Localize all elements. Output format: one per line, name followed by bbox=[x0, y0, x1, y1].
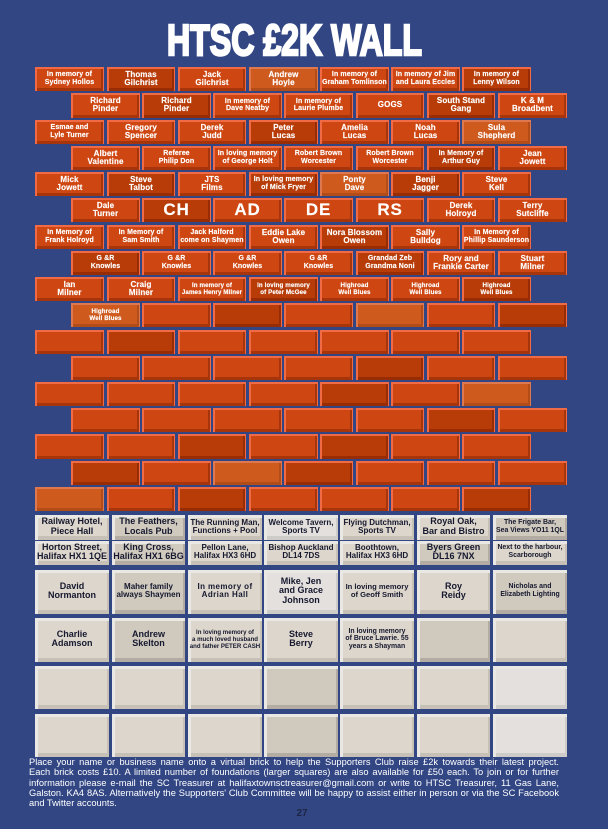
text block: how to take part: information please e-mail the SC Treasurer at halifaxtownsctreasurer@gmail.com or write to HTSC Treasurer, 11 Gas Lane, bbox=[29, 778, 559, 788]
brick row 5: JTS bbox=[204, 174, 219, 184]
foundation row: pub names: Welcome Tavern, bbox=[268, 518, 334, 526]
brick row 2: Richard bbox=[90, 96, 121, 105]
brick row 8: Grandma Noni bbox=[365, 262, 415, 270]
brick row 4: Jowett bbox=[520, 156, 545, 166]
brick row 2: Pinder bbox=[93, 104, 118, 113]
foundation row: sponsors 1: Roy bbox=[445, 580, 462, 590]
brick row 4: Robert Brown bbox=[295, 150, 342, 157]
brick row 7: In Memory of bbox=[119, 229, 163, 236]
brick row 9: Highroad bbox=[483, 282, 510, 288]
foundation row: pub names: Sports TV bbox=[358, 526, 396, 534]
brick row 1: Graham Tomlinson bbox=[322, 78, 387, 86]
brick row 17 bbox=[35, 487, 531, 511]
brick row 5: Jowett bbox=[57, 182, 82, 192]
brick row 2 bbox=[71, 93, 567, 118]
brick row 6: CH bbox=[163, 200, 190, 218]
brick row 8: Knowles bbox=[91, 262, 120, 270]
foundation row: sponsors 2: Steve bbox=[289, 628, 313, 638]
foundation row: pub names: Sports TV bbox=[282, 526, 320, 534]
text block: how to take part: and Twitter accounts. bbox=[29, 798, 117, 808]
brick row 1 bbox=[35, 67, 531, 91]
foundation row: pub names: Functions + Pool bbox=[193, 526, 257, 534]
brick row 1: Thomas bbox=[125, 70, 157, 78]
foundation row: sponsors 2: Skelton bbox=[132, 638, 165, 648]
panel: red brick wall bbox=[35, 67, 567, 511]
brick row 9: In loving memory bbox=[257, 282, 310, 288]
foundation row: sponsors 1: of Geoff Smith bbox=[351, 590, 403, 599]
brick row 2: K & M bbox=[521, 96, 544, 105]
brick row 1: Lenny Wilson bbox=[473, 78, 520, 86]
foundation row: pub names: Piece Hall bbox=[51, 526, 93, 536]
foundation row: pub names: Flying Dutchman, bbox=[343, 518, 411, 526]
foundation row: pub names: Sea Views YO11 1QL bbox=[496, 526, 564, 534]
foundation row: pub addresses: Pellon Lane, bbox=[201, 543, 249, 552]
brick row 1: Andrew bbox=[269, 70, 298, 78]
brick row 11 bbox=[35, 330, 531, 354]
brick row 4: In Memory of bbox=[439, 150, 483, 157]
foundation row: sponsors 2: In loving memory bbox=[348, 628, 406, 635]
brick row 3 bbox=[35, 120, 531, 144]
brick row 3: Lucas bbox=[272, 130, 295, 140]
brick row 1: Jack bbox=[203, 70, 221, 78]
brick row 7: Jack Halford bbox=[190, 229, 234, 236]
foundation row: sponsors 1: always Shaymen bbox=[116, 590, 181, 599]
brick row 7: In Memory of bbox=[474, 229, 519, 236]
brick row 4: Arthur Guy bbox=[442, 158, 480, 164]
brick row 7: Owen bbox=[343, 236, 366, 244]
brick row 5: Dave bbox=[345, 182, 364, 192]
foundation row: sponsors 2: Andrew bbox=[132, 628, 165, 638]
text block: how to take part: Place your name or business name onto a virtual brick to help the Supporters Club raise £2k towards their latest project. bbox=[29, 757, 559, 767]
foundation row: sponsors 1: Mike, Jen bbox=[281, 576, 321, 586]
foundation row: sponsors 2: a much loved husband bbox=[192, 636, 258, 642]
brick row 6 bbox=[71, 198, 567, 222]
foundation row: sponsors 2: Charlie bbox=[57, 628, 87, 638]
foundation row: sponsors 2: years a Shayman bbox=[349, 643, 405, 650]
foundation row: sponsors 1: In memory of bbox=[197, 582, 253, 591]
brick row 2: In memory of bbox=[296, 98, 341, 105]
brick row 9: Craig bbox=[131, 280, 151, 288]
brick row 2: Pinder bbox=[164, 104, 189, 113]
brick row 3: Sula bbox=[488, 122, 505, 132]
brick row 5: Jagger bbox=[412, 182, 439, 192]
brick row 5: Films bbox=[201, 182, 223, 192]
brick row 5: Ponty bbox=[343, 174, 366, 184]
text block: how to take part: Galston. KA4 8AS. Alternatively the Supporters' Club Committee will be happy to assist either in person or via the SC Facebook bbox=[29, 788, 559, 798]
brick row 8: Milner bbox=[520, 262, 545, 270]
brick row 3: Shepherd bbox=[478, 130, 515, 140]
brick row 6: Derek bbox=[450, 200, 472, 210]
brick row 12 bbox=[71, 356, 567, 380]
brick row 1: and Laura Eccles bbox=[396, 78, 455, 86]
brick row 3: Spencer bbox=[125, 130, 157, 140]
brick row 8: G &R bbox=[239, 255, 256, 262]
foundation row: sponsors 1: Johnson bbox=[282, 595, 320, 605]
foundation row: pub names: Royal Oak, bbox=[430, 516, 477, 526]
brick row 3: Derek bbox=[201, 122, 223, 132]
foundation row: pub names bbox=[35, 515, 567, 540]
foundation row: pub addresses bbox=[35, 541, 567, 565]
brick row 5 bbox=[35, 172, 531, 196]
brick row 1: In memory of bbox=[474, 71, 519, 78]
brick row 7: Phillip Saunderson bbox=[464, 236, 529, 244]
brick row 2: Broadbent bbox=[512, 104, 553, 113]
brick row 16 bbox=[71, 461, 567, 485]
brick row 8: Grandad Zeb bbox=[368, 255, 412, 262]
brick row 7: Sam Smith bbox=[122, 236, 160, 244]
brick row 1: In memory of bbox=[47, 71, 92, 78]
foundation row: pub addresses: Halifax HX3 6HD bbox=[346, 551, 408, 560]
brick row 6: Terry bbox=[523, 200, 542, 210]
brick row 4: Worcester bbox=[372, 158, 408, 164]
foundation row: pub addresses: Bishop Auckland bbox=[268, 543, 334, 552]
brick row 10: Highroad bbox=[92, 308, 119, 314]
foundation row: pub names: The Frigate Bar, bbox=[504, 519, 556, 526]
brick row 4: Jean bbox=[523, 148, 542, 158]
brick row 10 bbox=[71, 303, 567, 327]
brick row 4: Valentine bbox=[87, 156, 124, 166]
brick row 8: G &R bbox=[97, 255, 114, 262]
brick row 2: Dave Neatby bbox=[226, 105, 269, 112]
foundation row: pub addresses: Halifax HX1 1QE bbox=[37, 551, 107, 561]
brick row 2: GOGS bbox=[378, 100, 402, 109]
brick row 1: Hoyle bbox=[272, 78, 295, 86]
brick row 7: Nora Blossom bbox=[327, 228, 382, 236]
brick row 4: of George Holt bbox=[222, 158, 272, 164]
foundation row: pub addresses: King Cross, bbox=[123, 542, 174, 552]
brick row 8: Rory and bbox=[443, 254, 479, 262]
brick row 5: Kell bbox=[489, 182, 504, 192]
brick row 7: Frank Holroyd bbox=[45, 236, 94, 244]
foundation row: sponsors 2: Berry bbox=[289, 638, 313, 648]
foundation row: pub addresses: Boothtown, bbox=[355, 543, 399, 552]
foundation row: pub names: The Running Man, bbox=[190, 518, 260, 526]
foundation row: sponsors 2: of Bruce Lawrie. 55 bbox=[345, 635, 409, 642]
brick row 3: Noah bbox=[415, 122, 436, 132]
brick row 5: Benji bbox=[415, 174, 436, 184]
brick row 6: Sutcliffe bbox=[516, 208, 549, 218]
brick row 2: Laurie Plumbe bbox=[294, 105, 343, 112]
brick row 7: come on Shaymen bbox=[180, 236, 244, 244]
foundation row: sponsors 2: Adamson bbox=[51, 638, 92, 648]
brick row 4: Albert bbox=[94, 148, 117, 158]
brick row 2: Gang bbox=[451, 104, 471, 113]
brick row 8: Stuart bbox=[521, 254, 544, 262]
brick row 8 bbox=[71, 251, 567, 275]
brick row 1: Gilchrist bbox=[195, 78, 229, 86]
brick row 7: Eddie Lake bbox=[262, 228, 305, 236]
brick row 8: Frankie Carter bbox=[433, 262, 489, 270]
foundation row: pub addresses: Halifax HX3 6HD bbox=[194, 551, 256, 560]
brick row 6: Dale bbox=[97, 200, 114, 210]
foundation row: sponsors 1: Normanton bbox=[48, 590, 96, 600]
brick row 8: Knowles bbox=[233, 262, 262, 270]
brick row 5: In loving memory bbox=[254, 176, 313, 183]
foundation row: pub names: Bar and Bistro bbox=[422, 526, 484, 536]
brick row 4: Worcester bbox=[301, 158, 336, 164]
brick row 3: Lucas bbox=[414, 130, 437, 140]
text block: how to take part bbox=[29, 757, 559, 808]
brick row 3: Lucas bbox=[343, 130, 366, 140]
brick row 8: G &R bbox=[310, 255, 327, 262]
brick row 5: Talbot bbox=[129, 182, 153, 192]
brick row 5: Steve bbox=[130, 174, 152, 184]
brick row 4: Robert Brown bbox=[366, 150, 414, 157]
brick row 6: DE bbox=[306, 200, 331, 218]
brick row 9: Ian bbox=[64, 280, 75, 288]
brick row 5: Mick bbox=[60, 174, 79, 184]
foundation row: pub addresses: DL16 7NX bbox=[432, 551, 475, 561]
foundation row: pub addresses: Horton Street, bbox=[42, 542, 102, 552]
brick row 8: Knowles bbox=[304, 262, 333, 270]
brick row 7: Sally bbox=[416, 228, 435, 236]
brick row 9: In memory of bbox=[192, 282, 232, 288]
brick row 2: Richard bbox=[161, 96, 192, 105]
brick row 6: Turner bbox=[93, 208, 118, 218]
brick row 15 bbox=[35, 434, 531, 459]
foundation row: sponsors 1: Nicholas and bbox=[509, 583, 551, 590]
brick row 4: Philip Don bbox=[159, 158, 194, 164]
foundation row: pub addresses: Byers Green bbox=[427, 542, 480, 552]
brick row 6: RS bbox=[377, 200, 403, 218]
brick row 9: Well Blues bbox=[480, 288, 513, 296]
brick row 3: Peter bbox=[273, 122, 294, 132]
brick row 2: In memory of bbox=[225, 98, 270, 105]
brick row 1: Sydney Hollos bbox=[45, 78, 94, 86]
brick row 3: Lyle Turner bbox=[50, 132, 89, 138]
foundation row: sponsors 1: In loving memory bbox=[346, 582, 408, 591]
brick row 9: Well Blues bbox=[409, 288, 442, 296]
brick row 9: Highroad bbox=[341, 282, 368, 288]
brick row 7 bbox=[35, 225, 531, 249]
brick row 1: Gilchrist bbox=[124, 78, 158, 86]
foundation row: sponsors 1: Adrian Hall bbox=[202, 590, 248, 599]
brick row 7: In Memory of bbox=[47, 229, 92, 236]
brick row 9: Milner bbox=[129, 288, 153, 296]
brick row 4: In loving memory bbox=[218, 150, 277, 157]
brick row 2: South Stand bbox=[437, 96, 485, 105]
foundation row: sponsors 1 bbox=[35, 570, 567, 614]
foundation row: pub addresses: DL14 7DS bbox=[282, 551, 320, 560]
brick row 9: of Peter McGee bbox=[260, 288, 307, 296]
brick row 4: Referee bbox=[163, 150, 190, 157]
foundation row: pub addresses: Next to the harbour, bbox=[497, 544, 563, 551]
text block: how to take part: Each brick costs £10. A limited number of foundations (larger squares) are also available for £50 each. To join or for further bbox=[29, 767, 559, 777]
brick row 10: Well Blues bbox=[89, 314, 122, 322]
foundation row: sponsors 2 bbox=[35, 618, 567, 662]
brick row 3: Amelia bbox=[341, 122, 368, 132]
foundation row: sponsors 1: Elizabeth Lighting bbox=[500, 591, 560, 598]
brick row 9: Milner bbox=[57, 288, 82, 296]
page number: 27 bbox=[296, 808, 308, 819]
brick row 1: In memory of Jim bbox=[396, 71, 455, 78]
brick row 6: AD bbox=[234, 200, 261, 218]
brick row 3: Esmae and bbox=[51, 124, 88, 131]
foundation row: pub names: Locals Pub bbox=[124, 526, 172, 536]
brick row 7: Bulldog bbox=[410, 236, 441, 244]
foundation row: sponsors 2: In loving memory of bbox=[196, 628, 254, 636]
brick row 9: James Henry Milner bbox=[182, 288, 242, 296]
brick row 6: Holroyd bbox=[446, 208, 476, 218]
brick row 7: Owen bbox=[272, 236, 295, 244]
foundation row: sponsors 1: Maher family bbox=[124, 582, 173, 591]
foundation row: sponsors 2: and father PETER CASH bbox=[190, 642, 260, 650]
brick row 1: In memory of bbox=[332, 71, 377, 78]
brick row 3: Gregory bbox=[125, 122, 157, 132]
brick row 9 bbox=[35, 277, 531, 301]
brick row 14 bbox=[71, 408, 567, 432]
foundation row: pub addresses: Halifax HX1 6BG bbox=[113, 551, 184, 561]
foundation row: pub names: Railway Hotel, bbox=[41, 516, 103, 526]
foundation row: sponsors 1: Reidy bbox=[441, 590, 466, 600]
brick row 9: Well Blues bbox=[338, 288, 371, 296]
foundation row: pub names: The Feathers, bbox=[119, 516, 178, 526]
brick row 5: Steve bbox=[486, 174, 507, 184]
brick row 5: of Mick Fryer bbox=[261, 184, 306, 190]
brick row 9: Highroad bbox=[412, 282, 439, 288]
foundation row: sponsors 1: and Grace bbox=[279, 585, 323, 595]
foundation row: pub addresses: Scarborough bbox=[509, 552, 551, 559]
brick row 4 bbox=[71, 146, 567, 170]
brick row 8: Knowles bbox=[162, 262, 191, 270]
brick row 13 bbox=[35, 382, 531, 406]
foundation row: sponsors 1: David bbox=[60, 580, 84, 590]
brick row 8: G &R bbox=[168, 255, 185, 262]
brick row 3: Judd bbox=[202, 130, 222, 140]
